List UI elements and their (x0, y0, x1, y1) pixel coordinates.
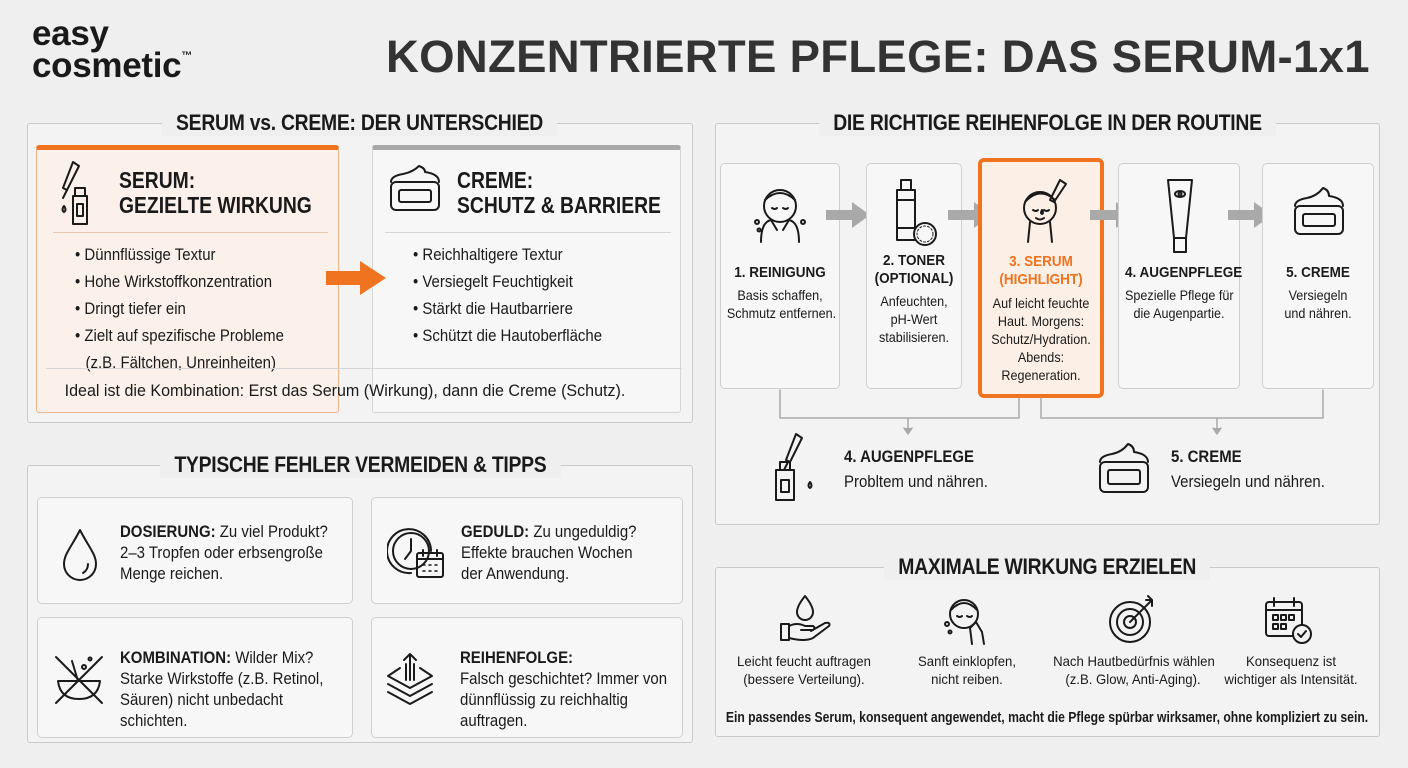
item: face tapping: nicht reiben. (931, 671, 1003, 687)
item: target: Nach Hautbedürfnis wählen (1053, 653, 1215, 669)
heading: maximale wirkung: MAXIMALE WIRKUNG ERZIELEN (899, 554, 1196, 579)
logo: cosmetic™ (32, 46, 192, 85)
card: geduld (371, 497, 683, 604)
icon: creme jar (390, 165, 440, 211)
creme bullets (413, 245, 602, 345)
panel: fehler & tipps (27, 465, 693, 743)
card: kombination: Starke Wirkstoffe (z.B. Retinol, (120, 669, 323, 688)
footer statement: Ein passendes Serum, konsequent angewendet, macht die Pflege spürbar wirksamer, ohne kompliziert zu sein. (726, 710, 1368, 726)
serum bullets: • Dünnflüssige Textur (75, 245, 216, 264)
step 3 highlight: Abends: (1018, 349, 1064, 365)
step 2 (866, 163, 962, 389)
icon: layers (387, 653, 433, 705)
arrow (826, 202, 866, 228)
bottom item: creme (1099, 443, 1325, 493)
heading: routine: DIE RICHTIGE REIHENFOLGE IN DER ROUTINE (833, 110, 1262, 135)
card: kombination (37, 617, 353, 738)
step 4 (1118, 163, 1240, 389)
step 3 highlight: Regeneration. (1001, 367, 1081, 383)
heading: serum vs creme: SERUM vs. CREME: DER UNTERSCHIED (177, 110, 543, 135)
step 4: 4. AUGENPFLEGE (1125, 264, 1242, 281)
icon: jar (1099, 443, 1149, 493)
icon: eye cream tube (1167, 179, 1193, 253)
step 2: Anfeuchten, (880, 293, 948, 309)
icon: jar (1294, 187, 1344, 235)
step 1: 1. REINIGUNG (734, 264, 826, 281)
card: kombination: Säuren) nicht unbedacht (120, 690, 283, 709)
item: calendar check: wichtiger als Intensität. (1224, 671, 1358, 687)
panel: serum vs creme (27, 123, 693, 423)
serum bullets: (z.B. Fältchen, Unreinheiten) (86, 353, 276, 372)
connectors (779, 389, 1324, 435)
icon: crossed bowl (55, 656, 103, 704)
item: hand drop: (bessere Verteilung). (743, 671, 865, 687)
step 2: pH-Wert (891, 311, 937, 327)
card: reihenfolge: dünnflüssig zu reichhaltig (460, 690, 628, 709)
icon: clock calendar (387, 528, 444, 578)
step 5: und nähren. (1284, 305, 1352, 321)
icon: dropper bottle (62, 161, 88, 225)
step 1: Basis schaffen, (737, 287, 823, 303)
step 3 highlight: Schutz/Hydration. (991, 331, 1091, 347)
arrow (1228, 202, 1262, 228)
bottom item: creme: 5. CREME (1171, 447, 1242, 466)
bottom item: augenpflege (775, 433, 988, 501)
step 3 highlight: Auf leicht feuchte (993, 295, 1089, 311)
icon: face washing (754, 189, 806, 243)
bottom item: creme: Versiegeln und nähren. (1171, 472, 1325, 491)
serum bullets (75, 245, 284, 372)
arrow: orange (326, 261, 386, 295)
serum heading: GEZIELTE WIRKUNG (119, 192, 312, 218)
heading: fehler: TYPISCHE FEHLER VERMEIDEN & TIPPS (174, 452, 546, 477)
title: KONZENTRIERTE PFLEGE: DAS SERUM-1x1 (386, 31, 1370, 82)
serum heading: SERUM: (119, 167, 195, 193)
item: hand drop: Leicht feucht auftragen (737, 653, 871, 669)
creme bullets: • Versiegelt Feuchtigkeit (413, 272, 573, 291)
icon: dropper bottle (775, 433, 812, 501)
item: face tapping: Sanft einklopfen, (918, 653, 1016, 669)
item: face tapping (918, 599, 1016, 687)
card: reihenfolge (371, 617, 683, 738)
serum bullets: • Hohe Wirkstoffkonzentration (75, 272, 272, 291)
panel: routine (715, 123, 1380, 525)
card: dosierung: Menge reichen. (120, 564, 223, 583)
step 5: 5. CREME (1286, 264, 1350, 281)
step 2: stabilisieren. (879, 329, 949, 345)
creme bullets: • Reichhaltigere Textur (413, 245, 563, 264)
card: geduld: GEDULD: Zu ungeduldig? (461, 522, 636, 541)
serum heading (119, 167, 312, 218)
arrow (1090, 202, 1118, 228)
step 3 highlight: Haut. Morgens: (998, 313, 1084, 329)
card: geduld: der Anwendung. (461, 564, 569, 583)
icon: toner bottle (896, 179, 937, 246)
icon: face with dropper (1023, 179, 1067, 243)
card: creme (372, 145, 681, 413)
card: reihenfolge: Falsch geschichtet? Immer von (460, 669, 667, 688)
creme heading (457, 167, 661, 218)
card: geduld: Effekte brauchen Wochen (461, 543, 633, 562)
logo (32, 14, 192, 85)
logo: easy (32, 14, 109, 53)
serum bullets: • Zielt auf spezifische Probleme (75, 326, 284, 345)
card: reihenfolge: auftragen. (460, 711, 527, 730)
creme bullets: • Stärkt die Hautbarriere (413, 299, 573, 318)
item: target: (z.B. Glow, Anti-Aging). (1065, 671, 1201, 687)
step 1: Schmutz entfernen. (727, 305, 836, 321)
step 4: die Augenpartie. (1133, 305, 1225, 321)
item: hand drop (737, 595, 871, 687)
card: serum (36, 145, 339, 413)
panel: maximale wirkung (715, 567, 1380, 737)
arrow (948, 202, 978, 228)
card: dosierung: 2–3 Tropfen oder erbsengroße (120, 543, 323, 562)
icon: drop (63, 529, 97, 581)
card: reihenfolge: REIHENFOLGE: (460, 648, 573, 667)
step 1 (720, 163, 840, 389)
footer note: Ideal ist die Kombination: Erst das Serum (Wirkung), dann die Creme (Schutz). (65, 381, 625, 400)
card: kombination: KOMBINATION: Wilder Mix? (120, 648, 313, 667)
step 3 highlight (978, 158, 1104, 398)
item: calendar check (1224, 597, 1358, 687)
step 4: Spezielle Pflege für (1125, 287, 1234, 303)
step 3 highlight: (HIGHLIGHT) (999, 271, 1083, 288)
step 5 (1262, 163, 1374, 389)
creme bullets: • Schützt die Hautoberfläche (413, 326, 602, 345)
step 5: Versiegeln (1289, 287, 1347, 303)
item: calendar check: Konsequenz ist (1246, 653, 1336, 669)
step 3 highlight: 3. SERUM (1009, 253, 1073, 270)
card: kombination: schichten. (120, 711, 187, 730)
bottom item: augenpflege: Probltem und nähren. (844, 472, 988, 491)
card: dosierung (37, 497, 353, 604)
bottom item: augenpflege: 4. AUGENPFLEGE (844, 447, 974, 466)
item: target (1053, 595, 1215, 687)
card: dosierung: DOSIERUNG: Zu viel Produkt? (120, 522, 328, 541)
step 2: (OPTIONAL) (875, 270, 953, 287)
creme heading: SCHUTZ & BARRIERE (457, 192, 661, 218)
step 2: 2. TONER (883, 252, 945, 269)
serum bullets: • Dringt tiefer ein (75, 299, 186, 318)
creme heading: CREME: (457, 167, 533, 193)
